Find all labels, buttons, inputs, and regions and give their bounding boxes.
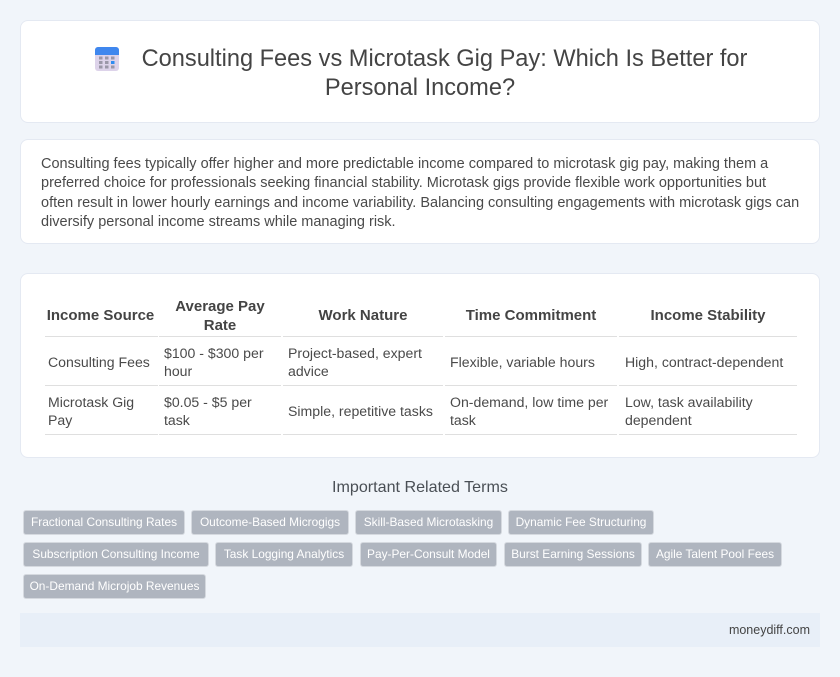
panel: title card [20, 20, 820, 123]
tag [355, 510, 502, 535]
footer [20, 613, 820, 647]
row: microtask gig pay: On-demand, low time per [450, 394, 608, 410]
heading: important related terms: Important Related Terms [332, 478, 508, 496]
row: consulting fees: Flexible, variable hours [450, 354, 595, 370]
tag [504, 542, 642, 567]
row: microtask gig pay: Pay [48, 412, 72, 428]
text block: summary: diversify personal income streams while managing risk. [41, 214, 396, 230]
tag: Subscription Consulting Income [32, 547, 200, 561]
tag [508, 510, 654, 535]
tag [23, 510, 185, 535]
title: Consulting Fees vs Microtask Gig Pay: Which Is Better for [142, 46, 747, 72]
row: microtask gig pay: Simple, repetitive tasks [288, 403, 433, 419]
row: consulting fees: High, contract-dependent [625, 354, 783, 370]
table: comparison [45, 298, 797, 435]
row: consulting fees: advice [288, 363, 329, 379]
tag [648, 542, 782, 567]
text block: summary [41, 156, 799, 230]
row: consulting fees: Project-based, expert [288, 345, 422, 361]
tag: Fractional Consulting Rates [31, 515, 177, 529]
row: microtask gig pay: task [164, 412, 190, 428]
header: average pay rate: Average Pay [175, 298, 265, 315]
text block: summary: preferred choice for professionals seeking financial stability. Microtask gigs provide flexible work opportunities but [41, 175, 766, 191]
tag: Skill-Based Microtasking [364, 515, 493, 529]
tag: Outcome-Based Microgigs [200, 515, 340, 529]
header: average pay rate: Rate [204, 317, 236, 334]
tags: related terms [23, 510, 782, 599]
header: income stability: Income Stability [650, 307, 766, 324]
header: income source: Income Source [47, 307, 154, 324]
icon: calendar [95, 47, 119, 71]
panel: introduction [20, 139, 820, 244]
tag [360, 542, 497, 567]
row: microtask gig pay: task [450, 412, 476, 428]
tag: Burst Earning Sessions [511, 547, 635, 561]
text block: summary: Consulting fees typically offer higher and more predictable income compared to microtask gig pay, making them a [41, 156, 768, 172]
tag: Pay-Per-Consult Model [367, 547, 490, 561]
row: consulting fees [48, 345, 784, 379]
row: microtask gig pay: $0.05 - $5 per [164, 394, 252, 410]
tag: Task Logging Analytics [224, 547, 344, 561]
tag: Agile Talent Pool Fees [656, 547, 774, 561]
tag: On-Demand Microjob Revenues [30, 579, 199, 593]
tag [23, 574, 206, 599]
panel: comparison table [20, 273, 820, 458]
row: consulting fees: hour [164, 363, 192, 379]
row: microtask gig pay: Low, task availability [625, 394, 753, 410]
header: work nature: Work Nature [319, 307, 407, 324]
row: microtask gig pay [48, 394, 753, 428]
header: average pay rate [175, 298, 265, 334]
footer source: moneydiff.com [729, 623, 810, 637]
row: microtask gig pay: dependent [625, 412, 692, 428]
text block: summary: often result in lower hourly earnings and income variability. Balancing consulting engagements with microtask gigs can [41, 195, 799, 211]
header: time commitment: Time Commitment [466, 307, 596, 324]
tag [215, 542, 353, 567]
title: Personal Income? [325, 75, 515, 101]
tag [191, 510, 349, 535]
title [142, 46, 747, 101]
row: microtask gig pay: Microtask Gig [48, 394, 134, 410]
row: consulting fees: $100 - $300 per [164, 345, 264, 361]
tag: Dynamic Fee Structuring [516, 515, 646, 529]
row: consulting fees: Consulting Fees [48, 354, 150, 370]
tag [23, 542, 209, 567]
